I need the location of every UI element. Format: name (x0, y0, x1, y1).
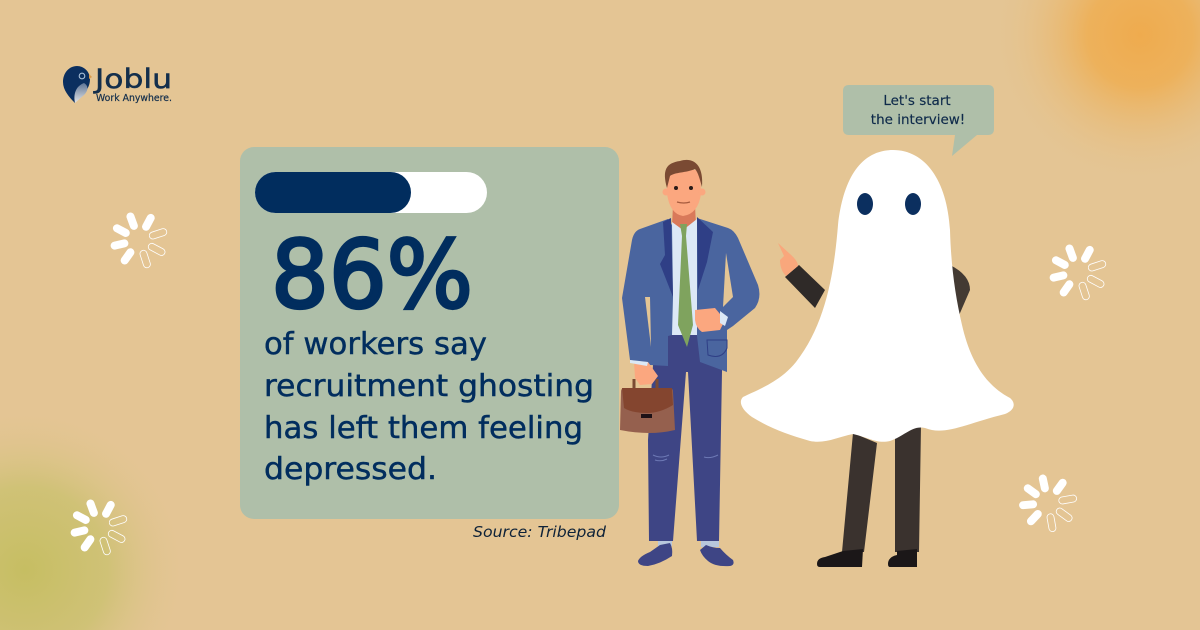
shoes (638, 543, 672, 566)
glow: bottom-left green (0, 405, 190, 630)
panel: statistic (240, 147, 619, 519)
face (667, 170, 701, 216)
lapels (660, 217, 713, 297)
eyes (674, 186, 678, 190)
ghost arm (785, 265, 825, 308)
ghost eyes (857, 193, 873, 215)
glow: top-right orange (990, 0, 1200, 185)
icon: bird pin (63, 66, 92, 103)
icon: sparkle bottom-left (70, 498, 128, 556)
progress bar fill (255, 172, 411, 213)
logo: Joblu (63, 64, 172, 104)
logo tagline: Work Anywhere. (96, 93, 172, 104)
ghost legs (842, 425, 921, 552)
gaps beside torso (723, 253, 733, 307)
socks (658, 541, 719, 547)
briefcase (634, 379, 657, 388)
statistic description: recruitment ghosting (264, 369, 594, 404)
statistic description: has left them feeling (264, 411, 583, 446)
statistic description: of workers say (264, 327, 487, 362)
hand at waist (695, 308, 725, 332)
ghost far arm (940, 265, 970, 320)
speech text: Let's start (883, 93, 951, 109)
neck (672, 205, 696, 236)
progress bar track (255, 172, 487, 213)
shirt (671, 219, 698, 335)
illustration: businessman (620, 160, 759, 566)
ghost shoes (817, 549, 863, 567)
icon: sparkle right (1049, 243, 1107, 301)
trousers (648, 335, 722, 541)
ghost pointing hand (778, 243, 798, 276)
illustration: ghost (741, 150, 1014, 567)
hand at bag (634, 361, 658, 385)
statistic description: depressed. (264, 452, 437, 487)
jacket pocket (707, 340, 727, 356)
statistic description (264, 327, 594, 487)
ghost body (741, 150, 1014, 442)
jacket (622, 218, 759, 372)
statistic: 86%: 86% (271, 221, 473, 330)
hair (665, 160, 702, 188)
icon: sparkle left (110, 211, 168, 269)
tie (678, 224, 693, 347)
speech bubble (843, 85, 994, 156)
icon: sparkle bottom-right (1015, 471, 1080, 535)
source note: Source: Tribepad (473, 523, 606, 541)
logo wordmark: Joblu (93, 64, 172, 95)
speech text: the interview! (871, 112, 965, 128)
